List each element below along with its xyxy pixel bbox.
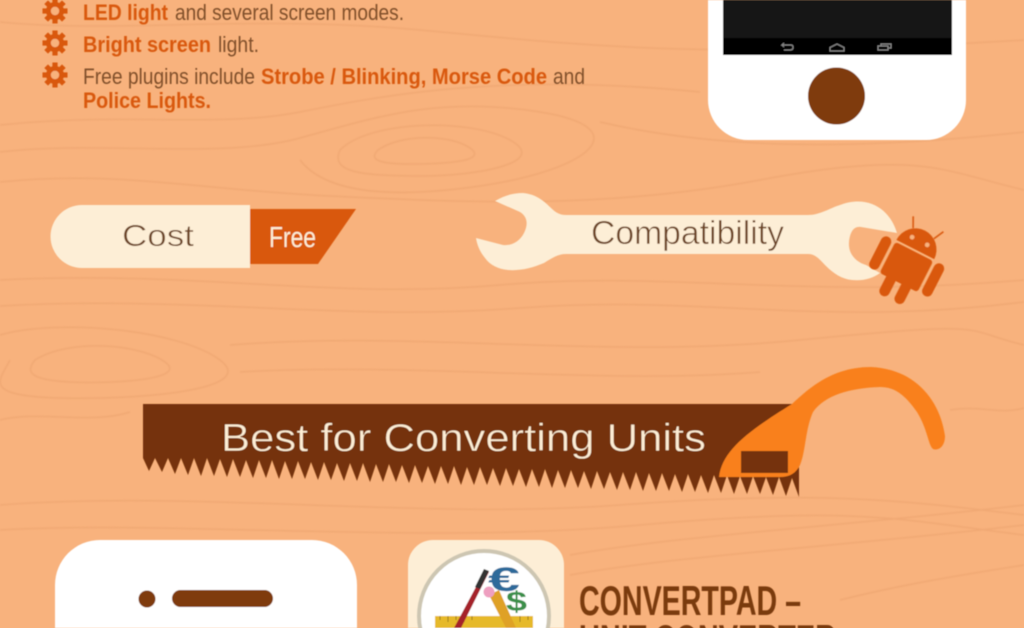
bullet text: free plugins: Free plugins include xyxy=(83,64,255,89)
wrench compatibility xyxy=(476,193,897,280)
saw handle xyxy=(719,367,945,477)
bullet text: LED light: and several screen modes. xyxy=(175,0,404,25)
bullet text: LED light xyxy=(83,0,404,25)
app title: CONVERTPAD – xyxy=(579,577,801,624)
bullet text: bright screen: light. xyxy=(218,32,259,57)
app icon convertpad xyxy=(408,540,564,628)
next phone top xyxy=(55,540,357,628)
bullet text: free plugins xyxy=(83,64,585,113)
phone bottom xyxy=(708,0,966,140)
bullet text: bright screen: Bright screen xyxy=(83,32,211,57)
saw label: Best for Converting Units xyxy=(221,417,706,460)
saw xyxy=(143,367,945,497)
dollar sign: $ xyxy=(506,586,528,617)
icon: gear bullet 3 xyxy=(42,62,68,88)
euro sign: € xyxy=(488,561,520,599)
saw blade xyxy=(143,404,799,497)
saw handle cutout xyxy=(741,451,788,473)
phone home button xyxy=(808,68,865,124)
bullet text: free plugins: Strobe / Blinking, Morse Code xyxy=(261,64,547,89)
phone speaker xyxy=(138,590,273,608)
feature list xyxy=(42,0,585,113)
icon: gear bullet 2 xyxy=(42,30,68,56)
icon: gear bullet 1 xyxy=(42,0,68,24)
compass leg xyxy=(454,570,489,628)
pencil xyxy=(489,590,516,628)
bullet text: LED light: LED light xyxy=(83,0,169,25)
compatibility label: Compatibility xyxy=(591,214,785,251)
cost label: Cost xyxy=(122,218,194,253)
ruler xyxy=(435,616,533,628)
icon: android robot xyxy=(859,208,959,315)
cost tag xyxy=(51,205,356,268)
bullet text: free plugins: and xyxy=(553,64,585,89)
free flag: Free xyxy=(269,222,316,254)
phone screen xyxy=(723,0,952,55)
bullet text: free plugins: Police Lights. xyxy=(83,88,211,113)
free flag xyxy=(250,209,356,264)
